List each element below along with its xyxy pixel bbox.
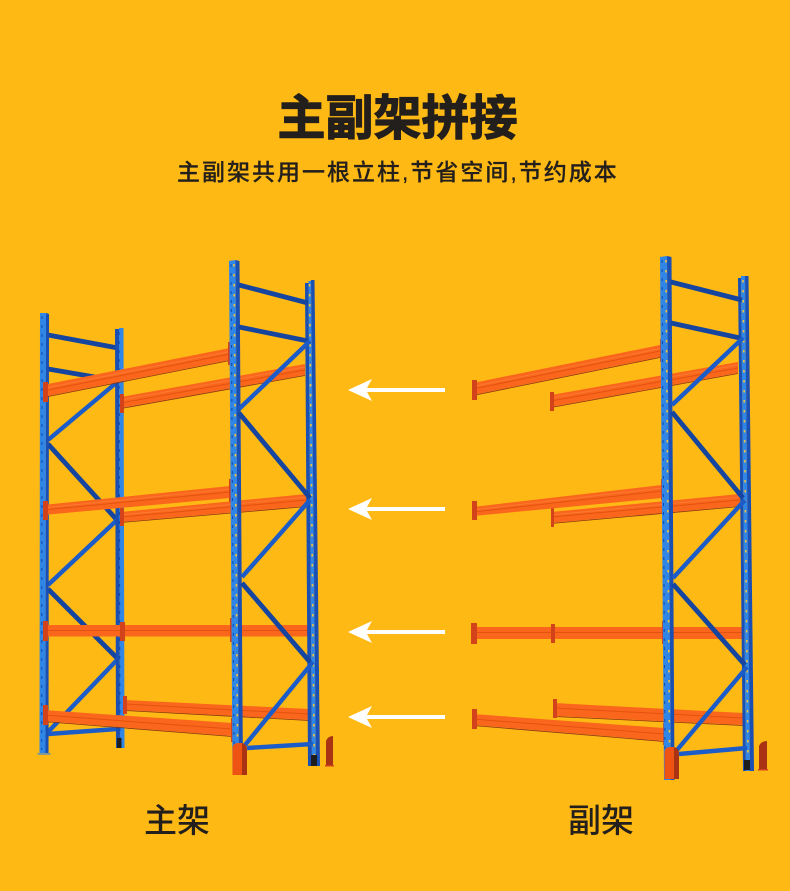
middle upright — [115, 328, 124, 748]
beam R7 bottom front — [472, 709, 666, 745]
left section braces — [48, 335, 118, 734]
front guard — [232, 743, 247, 775]
rear upright — [738, 276, 754, 771]
arrow row 4 — [348, 706, 445, 728]
beam 6 bottom rear — [123, 696, 309, 720]
beam 1 upper front — [43, 342, 231, 402]
left upright — [37, 313, 51, 755]
subtitle: 主副架共用一根立柱,节省空间,节约成本 — [177, 159, 619, 185]
arrow row 2 — [348, 498, 445, 520]
beam 4 second rear — [120, 494, 307, 526]
beam 3 second front — [43, 479, 232, 520]
right section braces — [239, 285, 313, 748]
beam R3 second front — [472, 479, 664, 520]
label: main frame: 主架 — [144, 802, 210, 839]
beam R6 bottom rear — [553, 699, 743, 726]
beam R5 third level — [471, 621, 743, 644]
arrow row 1 — [348, 379, 445, 401]
main frame rack — [37, 260, 334, 775]
beam R4 second rear — [551, 494, 740, 527]
beam R1 upper front — [472, 339, 663, 400]
arrow row 3 — [348, 621, 445, 643]
label: secondary frame: 副架 — [568, 802, 634, 839]
title: 主副架拼接 — [277, 92, 518, 146]
secondary frame rack — [471, 256, 768, 780]
rear guard — [325, 736, 334, 766]
beam R2 upper rear — [550, 362, 738, 411]
tall shared upright — [229, 260, 243, 775]
beam 2 upper rear — [120, 364, 305, 413]
rear guard — [758, 741, 768, 770]
beam 5 third level — [43, 618, 308, 642]
rear upright — [305, 280, 320, 766]
tall upright — [660, 256, 674, 780]
braces — [671, 282, 747, 754]
front guard — [664, 747, 679, 779]
beam 7 bottom front — [43, 705, 234, 742]
